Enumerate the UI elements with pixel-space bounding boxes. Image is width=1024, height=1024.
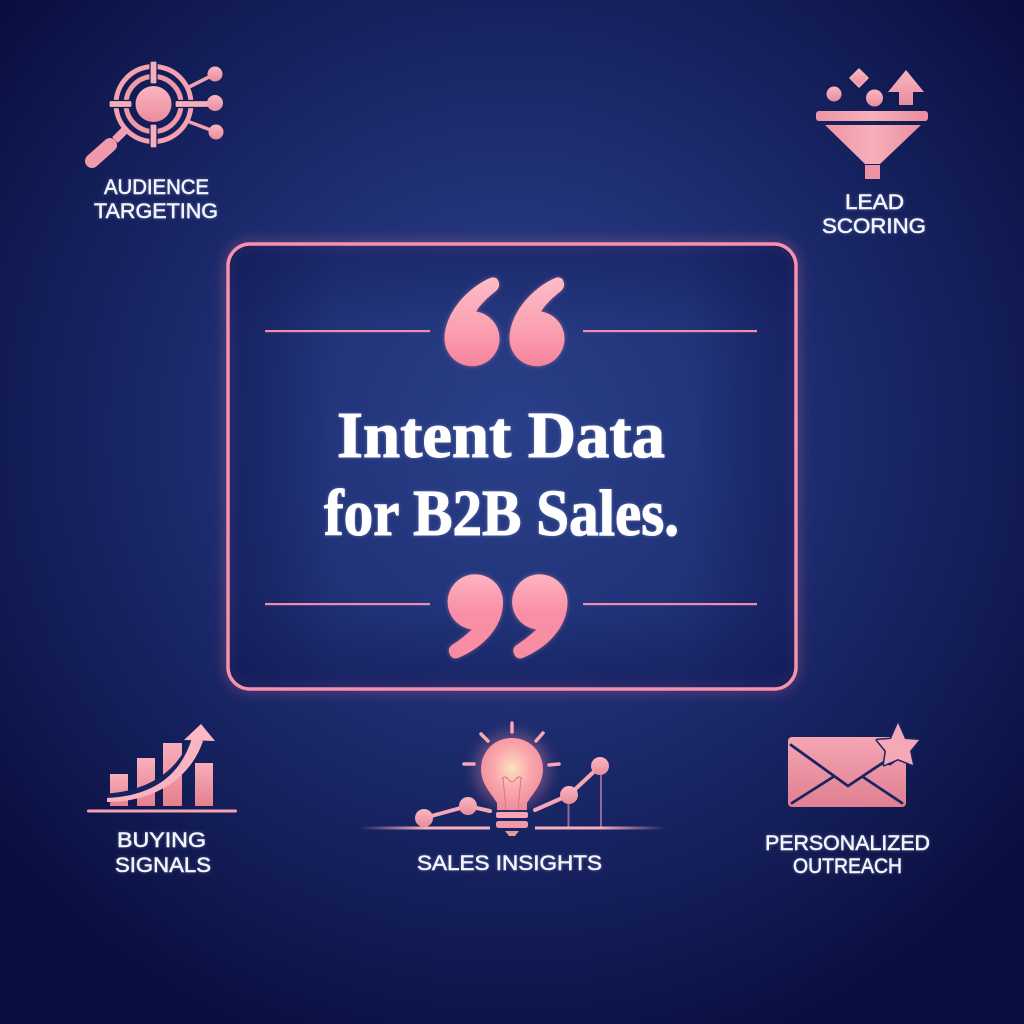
title	[324, 399, 679, 550]
bottom divider left	[265, 603, 430, 605]
closing quote mark	[448, 574, 568, 658]
title: for B2B Sales.	[324, 477, 679, 550]
label: personalized outreach: OUTREACH	[793, 855, 902, 878]
item: lead scoring	[816, 69, 928, 238]
label: lead scoring: LEAD	[845, 191, 904, 214]
bottom divider right	[583, 603, 757, 605]
panel: quote frame	[228, 244, 796, 689]
top divider right	[583, 330, 757, 332]
opening quote mark	[444, 277, 564, 366]
label: buying signals: BUYING	[117, 829, 206, 852]
icon: funnel with shapes	[816, 69, 928, 179]
icon: magnifier target with nodes	[92, 61, 224, 161]
label: lead scoring	[822, 191, 926, 238]
item: personalized outreach	[765, 723, 930, 878]
label: audience targeting	[94, 176, 218, 223]
icon: envelope with star	[788, 723, 919, 807]
label: personalized outreach: PERSONALIZED	[765, 832, 930, 855]
label: sales insights: SALES INSIGHTS	[417, 852, 602, 875]
icon: light bulb with trend line	[360, 723, 665, 836]
icon: rising bar chart	[87, 724, 237, 812]
item: audience targeting	[92, 61, 224, 223]
top divider left	[265, 330, 430, 332]
label: audience targeting: AUDIENCE	[104, 176, 209, 199]
item: buying signals	[87, 724, 237, 877]
item: sales insights	[360, 723, 665, 875]
label: buying signals	[115, 829, 211, 877]
label: personalized outreach	[765, 832, 930, 878]
label: lead scoring: SCORING	[822, 215, 926, 238]
title: Intent Data	[337, 399, 665, 472]
label: audience targeting: TARGETING	[94, 200, 218, 223]
label: buying signals: SIGNALS	[115, 854, 211, 877]
